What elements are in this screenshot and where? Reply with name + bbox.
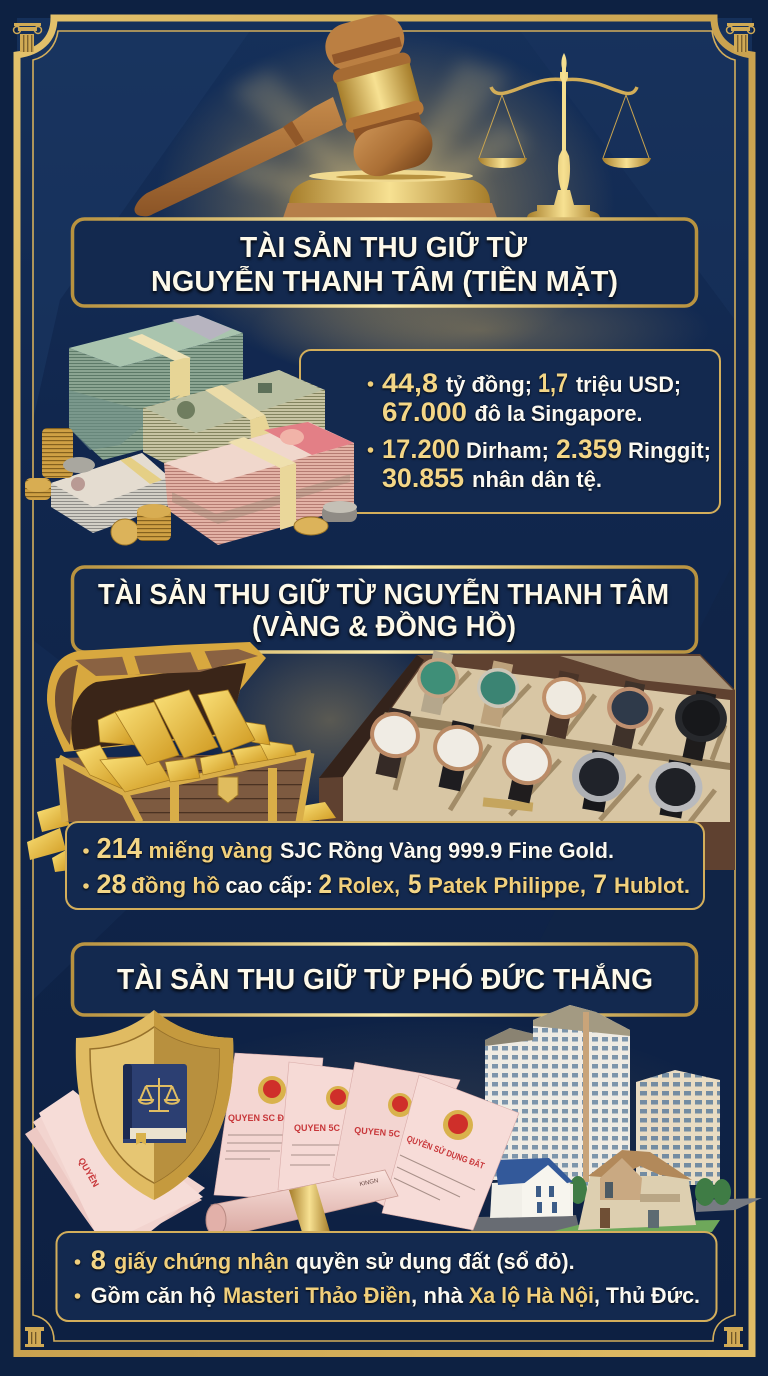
- text block: gold and watches: đồng hồ: [131, 873, 220, 898]
- text block: gold and watches: [83, 833, 690, 899]
- chest lock: [218, 777, 238, 803]
- text block: property: Masteri Thảo Điền: [223, 1283, 411, 1308]
- icon: scales of justice: [478, 53, 651, 218]
- illustration: apartment towers: [485, 1005, 720, 1190]
- text block: property: , Thủ Đức.: [594, 1283, 700, 1308]
- text block: property: [75, 1245, 700, 1308]
- icon: column bottom right: [724, 1327, 743, 1347]
- watch: white dial rose: [362, 704, 425, 781]
- panel: property details: [56, 1232, 716, 1321]
- gavel sound block: [283, 170, 497, 218]
- watch: green dial steel bracelet: [410, 648, 464, 718]
- icon: column top left: [14, 23, 42, 52]
- text block: cash amounts: 2.359: [556, 434, 622, 464]
- blue roof house: [490, 1158, 573, 1218]
- heading text: gold and watches: [98, 578, 669, 643]
- text block: gold and watches: Rolex,: [338, 873, 400, 898]
- certificate one: [214, 1053, 323, 1200]
- text block: gold and watches: 7: [593, 869, 607, 899]
- panel: cash details: [300, 350, 720, 513]
- text block: gold and watches: miếng vàng: [148, 838, 273, 863]
- watch: black dial steel second: [644, 757, 707, 821]
- large gold bars: [115, 690, 255, 765]
- silver coins: [63, 457, 357, 522]
- text block: gold and watches: Patek Philippe,: [428, 873, 586, 898]
- text block: cash amounts: 1,7: [538, 368, 568, 398]
- icon: law book: [123, 1064, 187, 1145]
- panel: gold and watches details: [66, 822, 704, 909]
- loose gold bars: [27, 802, 336, 872]
- certificate title: QUYỀN: [76, 1156, 101, 1189]
- text block: property: 8: [91, 1245, 106, 1275]
- grey banknote stack: [51, 453, 169, 533]
- icon: gavel: [134, 9, 497, 218]
- text block: gold and watches: SJC Rồng Vàng 999.9 Fine Gold.: [280, 838, 614, 863]
- text block: cash amounts: đô la Singapore.: [474, 401, 642, 426]
- text block: property: giấy chứng nhận: [114, 1249, 289, 1274]
- icon: small scales: [139, 1078, 179, 1111]
- heading panel: cash: [72, 219, 696, 306]
- heading text: gold and watches: TÀI SẢN THU GIỮ TỪ NGUYỄN THANH TÂM: [98, 578, 669, 611]
- text block: cash amounts: nhân dân tệ.: [472, 467, 602, 492]
- chest body: [59, 753, 311, 822]
- watch: green dial two-tone bracelet: [470, 658, 524, 730]
- text block: gold and watches: 5: [408, 869, 422, 899]
- gold coins: [25, 428, 328, 545]
- gavel handle: [134, 97, 343, 216]
- text block: property: quyền sử dụng đất (sổ đỏ).: [296, 1249, 575, 1274]
- certificate two: QUYEN 5C Đ: [294, 1123, 350, 1133]
- text block: property: Gồm căn hộ: [91, 1283, 216, 1308]
- illustration: houses: [470, 1150, 762, 1232]
- text block: cash amounts: triệu USD;: [576, 372, 681, 397]
- text block: cash amounts: 30.855: [382, 463, 464, 493]
- tan roof house: [578, 1150, 696, 1230]
- illustration: treasure chest with gold bars: [27, 642, 336, 872]
- shield with law book: [76, 1010, 233, 1200]
- certificate four: QUYỀN SỬ DỤNG ĐẤT: [405, 1133, 487, 1171]
- text block: gold and watches: Hublot.: [614, 873, 690, 898]
- icon: column top right: [726, 23, 754, 52]
- text block: cash amounts: 17.200: [382, 434, 460, 464]
- certificate four: [382, 1075, 519, 1230]
- watch: white dial rose second: [425, 717, 488, 794]
- illustration: land certificates: [214, 1053, 519, 1230]
- small gold bars: [76, 710, 296, 792]
- heading panel: gold and watches: [72, 567, 696, 652]
- text block: property: Xa lộ Hà Nội: [469, 1283, 594, 1308]
- heading text: cash: TÀI SẢN THU GIỮ TỪ: [240, 231, 527, 264]
- pink banknote stack: [164, 422, 354, 545]
- heading text: Pho Duc Thang: TÀI SẢN THU GIỮ TỪ PHÓ ĐỨC THẮNG: [117, 963, 653, 996]
- illustration: rolled certificate: KINGN: [359, 1178, 379, 1188]
- illustration: left certificate stack: [25, 1090, 205, 1238]
- heading panel: Pho Duc Thang: [72, 944, 696, 1015]
- text block: cash amounts: 67.000: [382, 397, 467, 427]
- illustration: watch box: [319, 648, 735, 870]
- text block: cash amounts: Ringgit;: [628, 438, 711, 463]
- illustration: money stacks and coins: [25, 315, 357, 545]
- heading text: cash: [151, 231, 618, 298]
- trees: [569, 1176, 731, 1206]
- text block: gold and watches: 28: [96, 869, 126, 899]
- heading text: cash: NGUYỄN THANH TÂM (TIỀN MẶT): [151, 266, 618, 298]
- gavel head: [320, 9, 438, 182]
- chest lid: [47, 642, 266, 752]
- text block: cash amounts: tỷ đồng;: [446, 372, 532, 397]
- text block: gold and watches: cao cấp:: [226, 873, 313, 898]
- certificate two: [278, 1062, 370, 1195]
- usd banknote stack: [143, 370, 325, 480]
- text block: cash amounts: Dirham;: [466, 438, 549, 463]
- watch: white dial rose third: [494, 731, 557, 806]
- text block: gold and watches: 2: [318, 869, 332, 899]
- text block: cash amounts: [368, 368, 711, 493]
- certificate three: [333, 1062, 460, 1215]
- icon: column bottom left: [25, 1327, 44, 1347]
- watch: white dial rose gold: [534, 668, 591, 742]
- illustration: rolled certificate: [206, 1170, 398, 1236]
- text block: gold and watches: 214: [96, 833, 142, 865]
- watch: dark dial rose gold: [599, 678, 658, 752]
- text block: property: , nhà: [411, 1283, 463, 1308]
- certificate three: QUYEN 5C: [354, 1125, 401, 1139]
- green banknote stack: [69, 315, 243, 460]
- heading text: gold and watches: (VÀNG & ĐỒNG HỒ): [252, 611, 516, 643]
- certificate one: QUYEN SC ĐỤ: [228, 1113, 291, 1123]
- watch: black dial steel: [567, 747, 630, 815]
- watch: black hublot: [667, 687, 732, 764]
- text block: cash amounts: 44,8: [382, 368, 438, 398]
